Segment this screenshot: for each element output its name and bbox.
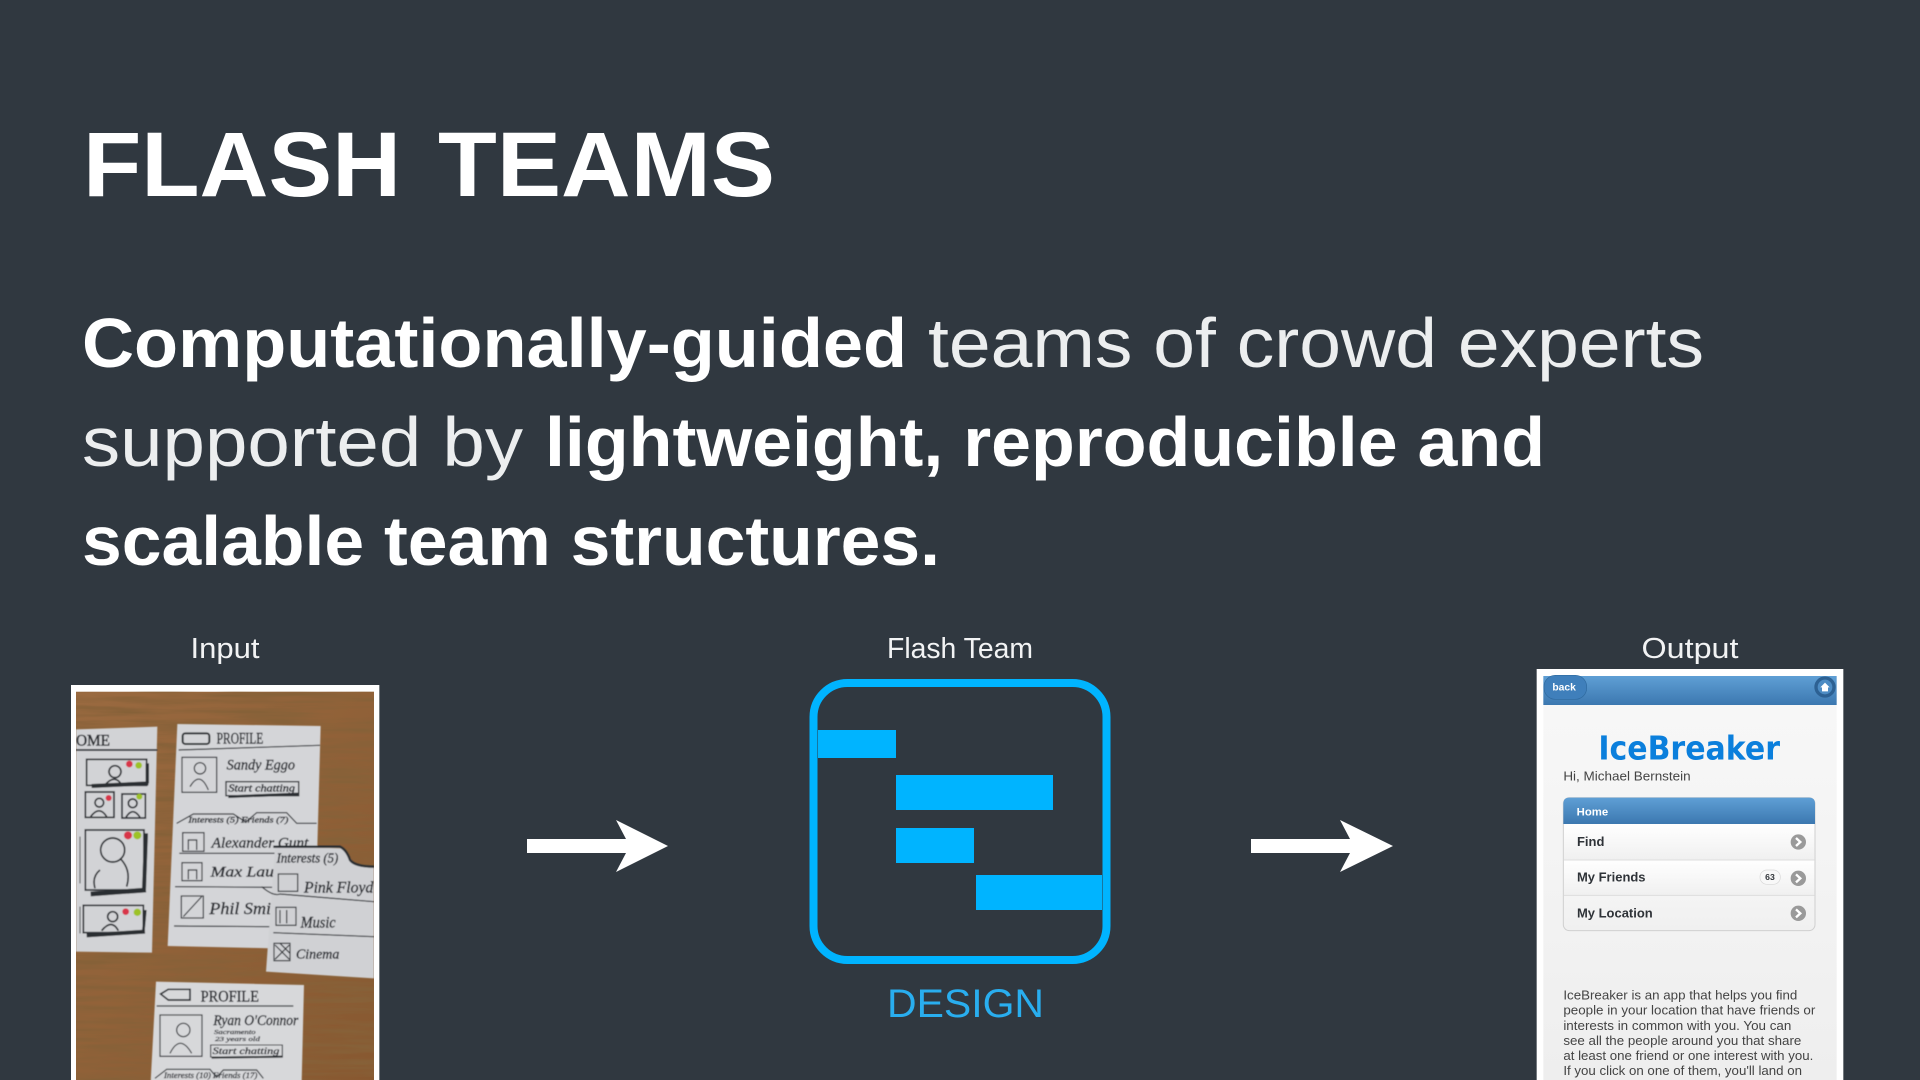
app description bbox=[1563, 988, 1815, 1078]
app header bar: back bbox=[1552, 683, 1576, 694]
sketch: interests tab: Interests (5) bbox=[276, 852, 339, 867]
label: input: Input bbox=[190, 633, 260, 665]
title: TEAMS bbox=[438, 114, 775, 216]
app menu bbox=[1563, 798, 1815, 931]
app description: see all the people around you that share bbox=[1563, 1034, 1801, 1048]
title bbox=[83, 114, 775, 216]
label: flash team: Flash Team bbox=[887, 633, 1033, 665]
greeting: Hi, Michael Bernstein bbox=[1563, 769, 1691, 784]
app menu: Find bbox=[1577, 834, 1604, 849]
sketch: home screen: OME bbox=[76, 732, 110, 749]
icon frame bbox=[814, 683, 1106, 960]
app description: at least one friend or one interest with you. bbox=[1563, 1049, 1813, 1063]
panel: input paper prototype photo bbox=[71, 685, 379, 1080]
sketch: second profile screen: PROFILE bbox=[201, 988, 259, 1005]
sketch: interests tab: Music bbox=[300, 914, 336, 931]
text block: definition: teams of crowd experts bbox=[928, 304, 1704, 382]
app menu: 63 bbox=[1765, 872, 1775, 882]
sketch: profile screen: Max Lau bbox=[209, 865, 274, 881]
sketch: profile screen: PROFILE bbox=[217, 730, 263, 747]
text block: definition: lightweight, reproducible and bbox=[545, 403, 1545, 481]
sketch: second profile screen bbox=[151, 982, 304, 1080]
arrow: input to flash team bbox=[527, 820, 668, 872]
arrow: flash team to output bbox=[1251, 820, 1393, 872]
app menu: Home bbox=[1577, 806, 1608, 818]
gantt bar 4 bbox=[976, 875, 1102, 910]
gantt bar 2 bbox=[896, 775, 1053, 810]
sketch: second profile screen: Start chatting bbox=[213, 1047, 280, 1057]
sketch: profile screen: Alexander Gunt bbox=[211, 835, 309, 851]
sketch: profile screen bbox=[168, 724, 321, 948]
app header bar bbox=[1543, 675, 1837, 705]
gantt bar 1 bbox=[818, 730, 896, 758]
sketch: second profile screen: Interests (10) Friends (17) bbox=[163, 1071, 258, 1080]
sketch: interests tab: Cinema bbox=[296, 947, 340, 962]
text block: definition: scalable team structures. bbox=[82, 502, 940, 580]
app logo: IceBreaker bbox=[1598, 729, 1781, 767]
app description: interests in common with you. You can bbox=[1563, 1019, 1791, 1033]
sketch: second profile screen: Ryan O'Connor bbox=[212, 1013, 299, 1029]
sketch: interests tab bbox=[262, 847, 374, 978]
sketch: profile screen: Start chatting bbox=[228, 784, 295, 795]
app description: people in your location that have friends or bbox=[1563, 1004, 1815, 1018]
title: FLASH bbox=[83, 114, 401, 216]
app description: If you click on one of them, you'll land on bbox=[1563, 1064, 1802, 1078]
app menu: My Friends bbox=[1577, 869, 1646, 884]
sketch: second profile screen: 23 years old bbox=[215, 1036, 261, 1043]
text block: definition bbox=[82, 304, 1704, 580]
label: output: Output bbox=[1642, 633, 1738, 665]
label: design: DESIGN bbox=[887, 982, 1044, 1026]
app description: IceBreaker is an app that helps you find bbox=[1563, 988, 1797, 1002]
sketch: profile screen: Interests (5) Friends (7) bbox=[187, 815, 288, 825]
panel: flash team gantt icon bbox=[814, 683, 1106, 960]
sketch: profile screen: Phil Smi bbox=[208, 899, 271, 918]
app menu: My Location bbox=[1577, 905, 1653, 920]
text block: definition: Computationally-guided bbox=[82, 304, 907, 382]
sketch: interests tab: Pink Floyd bbox=[303, 880, 374, 897]
gantt bar 3 bbox=[896, 828, 974, 863]
sketch: status dots bbox=[106, 761, 142, 916]
sketch: profile screen: Sandy Eggo bbox=[227, 757, 295, 773]
sketch: home screen bbox=[76, 727, 157, 953]
text block: definition: supported by bbox=[82, 403, 523, 481]
sketch: second profile screen: Sacramento bbox=[214, 1029, 257, 1036]
panel: output IceBreaker app screenshot bbox=[1537, 669, 1843, 1080]
